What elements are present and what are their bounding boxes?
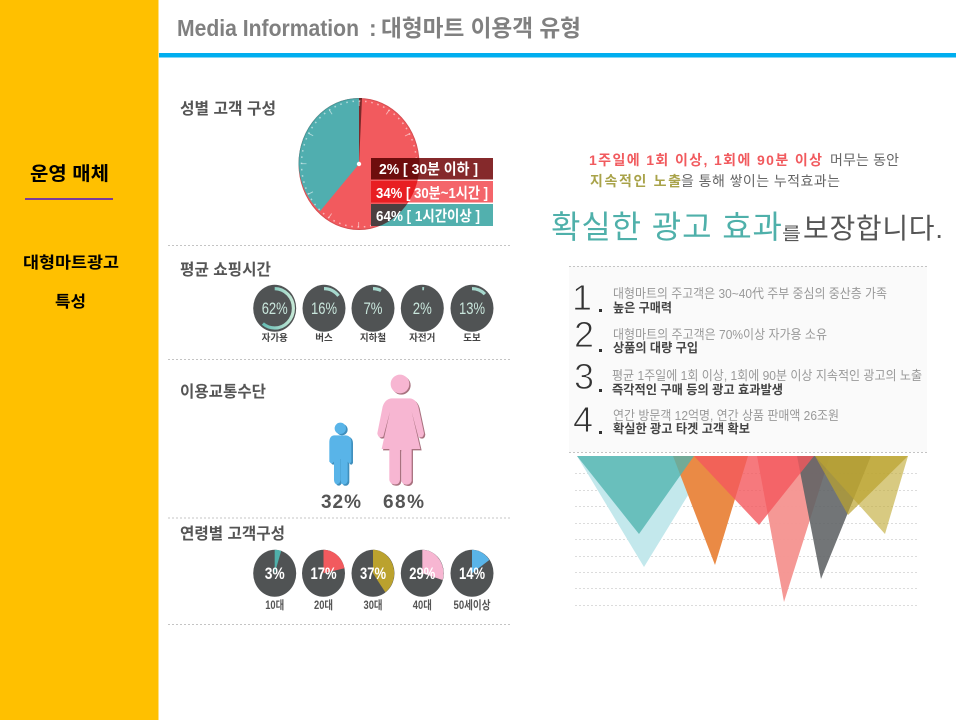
icon: woman figure 68% (377, 375, 425, 486)
gauge: 2% bicycle: 2% (413, 299, 432, 318)
page title: Media Information (177, 15, 359, 41)
heading: age composition: 연령별 고객구성 (180, 525, 285, 543)
panel: shopping time pie (180, 98, 493, 230)
pie: 17% twenties: 20대 (314, 598, 333, 612)
gauge: 62% car: 62% (262, 299, 288, 318)
pie: 14% fifties and over (450, 550, 494, 612)
pie: 3% teens: 10대 (265, 598, 284, 612)
pie: 3% teens (253, 550, 296, 612)
text block: intro copy (589, 152, 899, 189)
text block: intro copy: 1주일에 1회 이상, 1회에 90분 이상 (589, 152, 822, 168)
pie: 29% forties (401, 550, 444, 612)
text block: intro copy: 머무는 동안 (830, 152, 899, 168)
page title: 대형마트 이용객 유형 (381, 15, 581, 41)
triangle: light blue (577, 456, 712, 567)
gauge: 13% walking: 13% (459, 299, 485, 318)
point 3: 3 (574, 356, 594, 397)
point 4: 연간 방문객 12억명, 연간 상품 판매액 26조원 (613, 408, 839, 423)
pie: 29% forties: 40대 (413, 598, 432, 612)
gauge: 7% subway: 지하철 (360, 332, 386, 344)
value: 68%: 68% (383, 492, 424, 513)
gauge: 16% bus: 16% (311, 299, 337, 318)
page title: : (369, 15, 377, 41)
pie: 3% teens: 3% (265, 564, 285, 583)
point 3: 즉각적인 구매 등의 광고 효과발생 (612, 382, 783, 397)
title rule (159, 53, 956, 58)
panel: transport / gender figures (180, 375, 425, 513)
icon: child figure 32% (329, 423, 353, 486)
headline: guaranteed advertising effect: 확실한 광고 효과 (551, 209, 782, 245)
gauge: 2% bicycle: 자전거 (409, 332, 435, 344)
sidebar heading: 운영 매체 (30, 163, 109, 185)
legend: 2% (371, 158, 493, 180)
point 1 (572, 277, 887, 318)
triangle: pink (757, 456, 830, 602)
sidebar panel (0, 0, 158, 720)
pie chart (298, 98, 420, 230)
point 2: 2 (574, 314, 594, 355)
triangle: teal (577, 456, 694, 534)
panel: age composition (180, 525, 494, 612)
triangle: pale olive (815, 456, 908, 534)
legend: 34%: 34% [ 30분~1시간 ] (376, 185, 488, 202)
value: 32%: 32% (321, 492, 361, 513)
point 1: 1 (572, 277, 592, 318)
headline: guaranteed advertising effect (551, 209, 943, 245)
point 4: 4 (573, 399, 593, 440)
headline: guaranteed advertising effect: 보장합니다. (803, 213, 943, 244)
point 2 (574, 314, 827, 355)
heading: customer composition: 성별 고객 구성 (180, 100, 276, 118)
pie: 14% fifties and over: 50세이상 (454, 599, 491, 612)
point 4 (573, 399, 839, 440)
legend: 64%: 64% [ 1시간이상 ] (376, 208, 480, 225)
point 1: 높은 구매력 (613, 300, 672, 315)
pie: 37% thirties: 37% (360, 564, 386, 583)
point 3 (574, 356, 922, 397)
point 1: 대형마트의 주고객은 30~40代 주부 중심의 중산층 가족 (613, 286, 887, 301)
gauge: 62% car (253, 285, 296, 344)
gauge: 16% bus (302, 285, 346, 344)
text block: intro copy: 지속적인 노출 (590, 173, 681, 189)
headline: guaranteed advertising effect: 를 (782, 224, 801, 244)
gauge: 13% walking: 도보 (463, 333, 481, 344)
triangle: olive (815, 456, 908, 515)
heading: average shopping time: 평균 쇼핑시간 (180, 261, 271, 279)
text block: intro copy: 을 통해 쌓이는 누적효과는 (681, 173, 840, 189)
gauge: 2% bicycle (401, 285, 444, 344)
pie: 14% fifties and over: 14% (459, 564, 485, 583)
heading: transportation: 이용교통수단 (180, 383, 266, 401)
pie: 29% forties: 29% (409, 564, 435, 583)
page title (177, 15, 581, 41)
gauge: 7% subway: 7% (364, 299, 382, 318)
triangle chart (575, 456, 918, 606)
triangle: red (694, 456, 814, 525)
pie: 37% thirties: 30대 (364, 598, 382, 612)
gauge: 16% bus: 버스 (315, 332, 333, 344)
panel: four key points (569, 266, 927, 452)
gauge: 13% walking (450, 285, 494, 344)
sidebar label: characteristics: 특성 (55, 293, 86, 311)
gauge: 7% subway (352, 285, 394, 344)
triangle: orange (673, 456, 748, 565)
point 2: 대형마트의 주고객은 70%이상 자가용 소유 (613, 327, 827, 342)
point 2: 상품의 대량 구입 (613, 341, 698, 355)
panel: average shopping time (180, 261, 494, 344)
triangle: dark gray (797, 456, 871, 579)
legend: 2%: 2% [ 30분 이하 ] (379, 161, 478, 178)
point 4: 확실한 광고 타겟 고객 확보 (613, 421, 750, 436)
sidebar label: hypermarket advertising: 대형마트광고 (23, 254, 119, 272)
sidebar underline (25, 198, 113, 200)
pie: 17% twenties (302, 550, 345, 612)
point 3: 평균 1주일에 1회 이상, 1회에 90분 이상 지속적인 광고의 노출 (612, 368, 922, 383)
pie: 37% thirties (352, 550, 394, 612)
gauge: 62% car: 자가용 (262, 332, 288, 344)
pie: 17% twenties: 17% (310, 564, 336, 583)
